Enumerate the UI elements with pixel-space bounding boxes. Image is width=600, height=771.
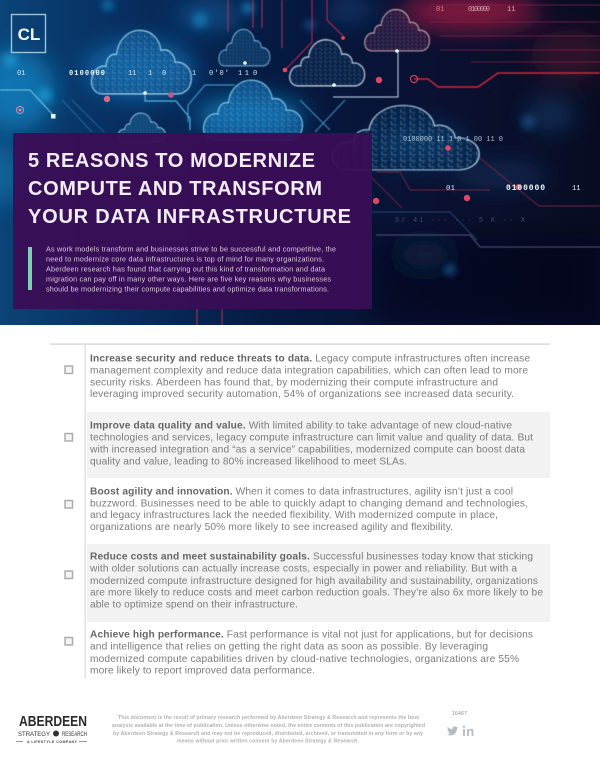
icon: checkbox [65,571,72,578]
reason 2 text: technologies and services, legacy compute infrastructure can limit value and quality of data. But [90,432,533,444]
document number: 16467 [452,711,467,717]
icon: twitter [447,726,458,735]
binary digits: 0100000 [468,6,490,14]
icon: checkbox [65,638,72,645]
binary digits: 11 [507,6,515,14]
reason 4 text: are more likely to reduce costs and meet carbon reduction goals. They’re also 6x more likely to be [90,588,543,598]
footer disclaimer: by Aberdeen Strategy & Research and may not be reproduced, distributed, archived, or transmitted in any form or by any [113,731,423,737]
binary digits: 11 [238,70,249,78]
reason 4: costs [65,552,543,610]
clouds [91,9,479,170]
reason 3 text: organizations are nearly 50% more likely to see increased agility and flexibility. [90,522,453,533]
red and white nodes [16,36,521,204]
reason 5 text: Achieve high performance. Fast performance is vital not just for applications, but for decisions [90,630,533,640]
icon: checkbox [65,500,72,508]
circuit lines [0,0,600,325]
binary digits: 1 [148,70,152,78]
reason 5 text: modernized compute capabilities driven by cloud-native technologies, organizations are 55% [90,654,519,665]
reason 5: performance [65,630,533,676]
footer disclaimer [112,715,425,744]
logo: Aberdeen Strategy & Research: ABERDEEN [19,714,87,730]
reason 1 text: Increase security and reduce threats to data. Legacy compute infrastructures often increase [90,354,530,364]
intro text: As work models transform and businesses strive to be successful and competitive, the [46,244,336,254]
logo: CL [12,14,46,52]
hero background image [0,0,600,325]
panel: title and intro [13,133,372,309]
binary digits: 11 [572,185,580,193]
reason 3 text: Boost agility and innovation. When it comes to data infrastructures, agility isn’t just a cool [90,486,513,498]
intro text: Aberdeen research has found that carrying out this kind of transformation and data [46,264,325,274]
title: YOUR DATA INFRASTRUCTURE [28,206,351,228]
binary digits: 0100000 [506,184,545,193]
icon: checkbox [65,434,72,441]
reason 3 text: and legacy infrastructures lack the needed flexibility. With modernized compute in place, [90,510,498,521]
accent bar [28,247,32,290]
binary digits: S/ 41 ··· ··· 5 K ·· X [395,217,526,225]
reason 2 text [89,420,533,468]
list: five reasons [50,344,550,678]
reason 4 text: with older solutions can actually increase costs, especially in power and reliability. But with a [89,564,517,574]
binary digits: 0 [162,70,166,78]
logo: Aberdeen Strategy & Research: A LIFESTYLE COMPANY [27,740,78,744]
logo: Aberdeen Strategy & Research: STRATEGY [18,731,51,738]
reason 1 text: leveraging improved security automation, 54% of organizations see increased data security. [90,389,514,400]
binary digits: 01 [17,70,25,78]
reason 5 text: and intelligence that relies on getting the right data as soon as possible. By leveraging [90,642,488,652]
reason 3 text: buzzword. Businesses need to be able to quickly adapt to changing demand and technologies, [90,498,528,510]
reason 1 text: security risks. Aberdeen has found that, by modernizing their compute infrastructure and [90,378,498,388]
binary digits [17,6,580,225]
binary digits: 01 [446,185,456,193]
intro text: should be modernizing their compute capabilities and optimize data transformations. [46,284,329,294]
intro text [46,244,336,294]
intro text: need to modernize core data infrastructures is top of mind for many organizations. [46,254,324,264]
reason 1: security [65,354,530,400]
binary digits: 0 [253,70,257,78]
logo: Aberdeen Strategy & Research: RESEARCH [62,731,87,738]
reason 4 text: able to optimize spend on their infrastructure. [90,600,298,610]
reason 1 text: management complexity and reduce data integration capabilities, which can often lead to more [90,366,528,376]
reason 3: agility [65,486,528,533]
binary digits: 11 [128,70,136,78]
binary digits: 1 [192,70,196,78]
reason 2 text: with increased integration and “as a service” capabilities, modernized compute can boost data [89,444,525,456]
reason 2 text: quality and value, leading to 80% increased likelihood to meet SLAs. [90,456,407,468]
reason 5 text: more likely to report improved data performance. [90,666,315,676]
title [28,150,351,228]
footer disclaimer: analysis available at the time of publication. Unless otherwise noted, the entire contents of this publication are copyrighted [112,723,425,729]
footer disclaimer: This document is the result of primary research performed by Aberdeen Strategy & Research and represents the best [118,715,419,721]
icon: checkbox [65,366,72,374]
reason 1 text [90,354,530,400]
reason 3 text [90,486,528,533]
reason 4 text [89,552,543,610]
reason 4 text: modernized compute infrastructure designed for high availability and sustainability, organizations [90,576,538,587]
title: 5 REASONS TO MODERNIZE [28,150,315,172]
reason 4 text: Reduce costs and meet sustainability goals. Successful businesses today know that sticking [90,552,533,562]
title: COMPUTE AND TRANSFORM [28,178,322,200]
reason 2: data quality [65,420,533,468]
binary digits: 0'0' [209,70,229,78]
footer disclaimer: means without prior written consent by Aberdeen Strategy & Research. [177,738,360,744]
logo: CL: CL [18,25,40,44]
binary digits: 01 [436,6,444,14]
reason 2 text: Improve data quality and value. With limited ability to take advantage of new cloud-native [90,420,512,432]
logo: Aberdeen Strategy & Research [16,714,87,744]
intro text: migration can pay off in many other ways. Here are five key reasons why businesses [46,274,331,284]
reason 5 text [90,630,533,676]
binary digits: 0100000 11 1 0 1 00 11 0 [403,136,503,144]
binary digits: 0100000 [69,70,105,78]
icon: linkedin [463,726,474,736]
